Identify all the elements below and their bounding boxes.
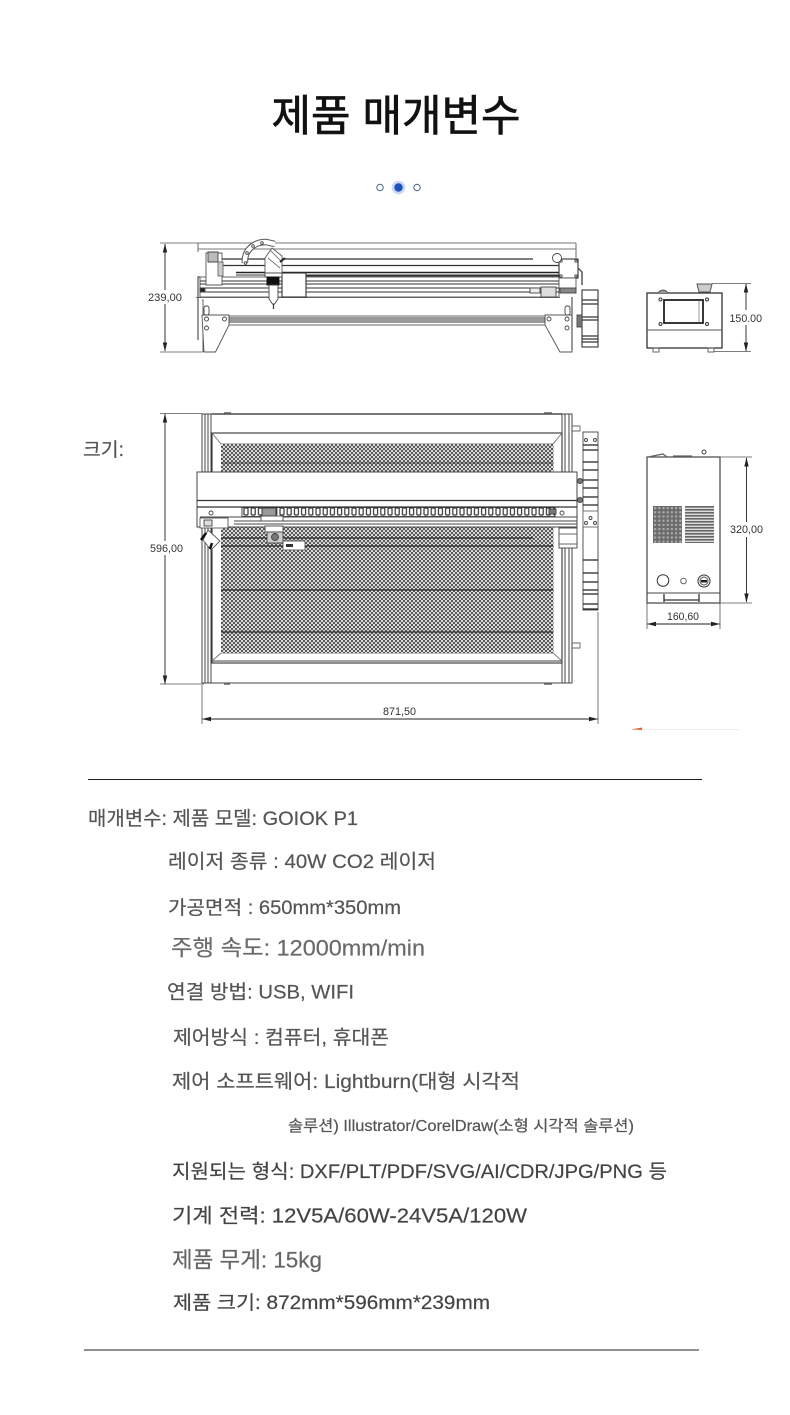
dimension: 320,00: 320,00 [730,524,763,536]
laser head [265,273,282,309]
dimension: 320,00 [720,457,764,603]
spec: laser type: 레이저 종류 : 40W CO2 레이저 [168,851,436,873]
spec: travel speed: 주행 속도: 12000mm/min [171,936,425,960]
spec: machine power: 기계 전력: 12V5A/60W-24V5A/120W [172,1204,527,1228]
spec: control software: 제어 소프트웨어: Lightburn(대형 시각적 [172,1071,520,1093]
honeycomb mesh bed [221,444,554,653]
laser module [265,526,305,550]
vent grid [653,506,682,543]
top frame rail [198,243,576,258]
specification list [88,808,667,1314]
diagram: control box back [647,450,720,603]
spec: control software continued: 솔루션) Illustrator/CorelDraw(소형 시각적 솔루션) [288,1117,634,1135]
inner window bevel [212,433,562,663]
top divider [88,778,702,780]
spec: working area: 가공면적 : 650mm*350mm [168,897,401,919]
dimension: height 239,00 [147,243,203,352]
cable chain arc [244,242,275,264]
lower beam and legs [202,297,572,352]
spec: connection: 연결 방법: USB, WIFI [167,982,354,1004]
spec: product size: 제품 크기: 872mm*596mm*239mm [173,1292,490,1314]
dimension: depth 596,00 [149,414,204,684]
dimension: width 871,50: 871,50 [383,706,416,718]
gantry extrusion [196,275,560,298]
diagram: top view of machine [197,413,598,684]
dimension: 150.00 [712,284,763,352]
outer frame [202,413,580,684]
spec: supported formats: 지원되는 형식: DXF/PLT/PDF/SVG/AI/CDR/JPG/PNG 등 [172,1161,667,1183]
dimension: width 871,50 [202,612,598,724]
spec: control method: 제어방식 : 컴퓨터, 휴대폰 [173,1027,389,1049]
box body [647,293,722,352]
dimension: depth 596,00: 596,00 [150,543,183,555]
gantry rail [200,511,577,528]
dimension: 160,60: 160,60 [667,611,699,623]
dimension: 150.00: 150.00 [730,313,762,325]
screws [659,298,708,326]
Y motor [559,528,577,548]
spec: model: 매개변수: 제품 모델: GOIOK P1 [88,808,358,830]
vent louvres [685,506,714,543]
dimension: height 239,00: 239,00 [148,292,182,304]
rear ports [657,575,710,587]
diagram: control box front [647,284,722,352]
touch screen [664,300,703,323]
right side drag chain [577,290,598,347]
bottom divider [84,1349,699,1351]
spec: weight: 제품 무게: 15kg [172,1248,322,1272]
gantry top [197,472,577,527]
laser carriage block [265,248,306,297]
title: 제품 매개변수 [272,82,520,144]
emergency stop button [658,284,712,293]
diagram: front view of machine [196,242,598,352]
right motor [530,254,582,297]
pagination dots [377,181,420,194]
left end plate [198,252,223,352]
mirror mount [201,530,220,550]
dimension: 160,60 [647,603,720,629]
gantry drag chain [242,508,556,516]
box body [647,450,720,603]
horizontal rods [222,259,560,272]
size label: 크기: [83,439,124,461]
red accent mark [631,728,740,730]
side drag chain [578,432,598,610]
